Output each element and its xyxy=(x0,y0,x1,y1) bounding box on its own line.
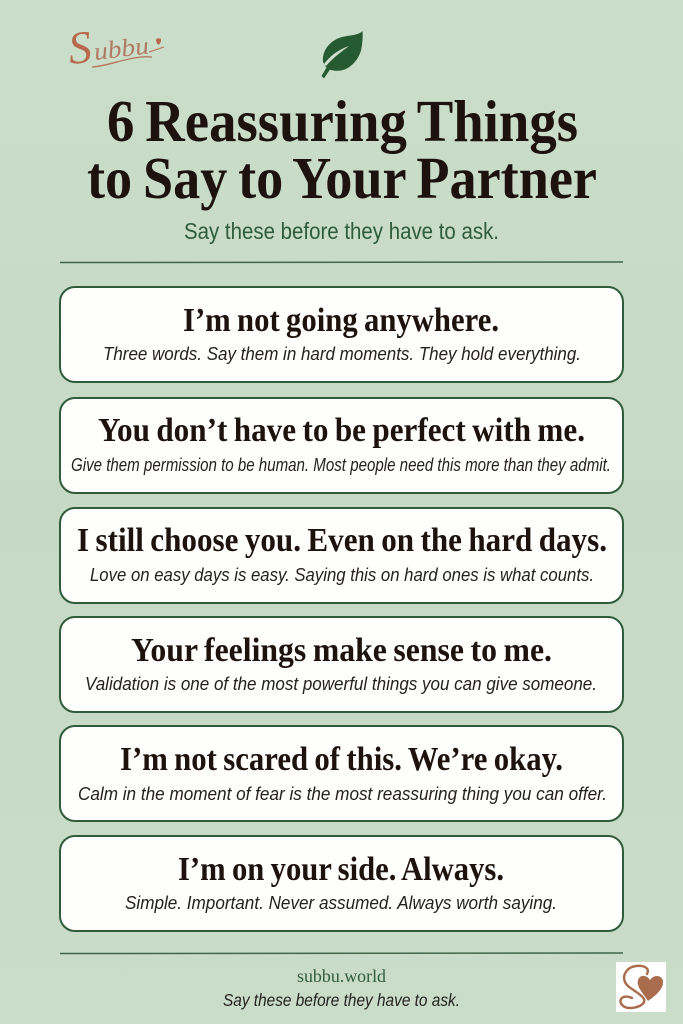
panel: card 1 xyxy=(60,287,623,382)
logo: Subbu signature xyxy=(66,21,164,74)
logo: Subbu signature: ubbu xyxy=(92,32,150,66)
card 4 heading: Your feelings make sense to me. xyxy=(131,632,552,669)
card 6 text: Simple. Important. Never assumed. Always worth saying. xyxy=(125,893,557,913)
title: to Say to Your Partner xyxy=(87,145,597,211)
logo: Subbu signature: S xyxy=(66,21,94,74)
card 2 heading: You don’t have to be perfect with me. xyxy=(98,412,585,449)
card 4 text: Validation is one of the most powerful things you can give someone. xyxy=(85,674,597,694)
panel: card 5 xyxy=(60,726,623,821)
card 5 heading: I’m not scared of this. We’re okay. xyxy=(120,741,563,778)
icon: leaf xyxy=(322,31,363,78)
logo: S with heart xyxy=(616,962,666,1012)
panel: card 2 xyxy=(60,398,623,493)
title xyxy=(87,88,597,211)
panel: card 4 xyxy=(60,617,623,712)
card 1 text: Three words. Say them in hard moments. They hold everything. xyxy=(103,344,581,364)
footer tagline: Say these before they have to ask. xyxy=(223,990,460,1010)
card 3 heading: I still choose you. Even on the hard days. xyxy=(77,522,607,559)
footer website: subbu.world xyxy=(297,966,386,986)
panel: card 6 xyxy=(60,836,623,931)
card 5 text: Calm in the moment of fear is the most reassuring thing you can offer. xyxy=(78,784,607,804)
panel: card 3 xyxy=(60,508,623,603)
title: 6 Reassuring Things xyxy=(107,88,578,154)
card 6 heading: I’m on your side. Always. xyxy=(178,851,504,888)
subtitle: Say these before they have to ask. xyxy=(184,218,499,244)
card 1 heading: I’m not going anywhere. xyxy=(183,302,499,339)
card 3 text: Love on easy days is easy. Saying this on hard ones is what counts. xyxy=(90,565,594,585)
